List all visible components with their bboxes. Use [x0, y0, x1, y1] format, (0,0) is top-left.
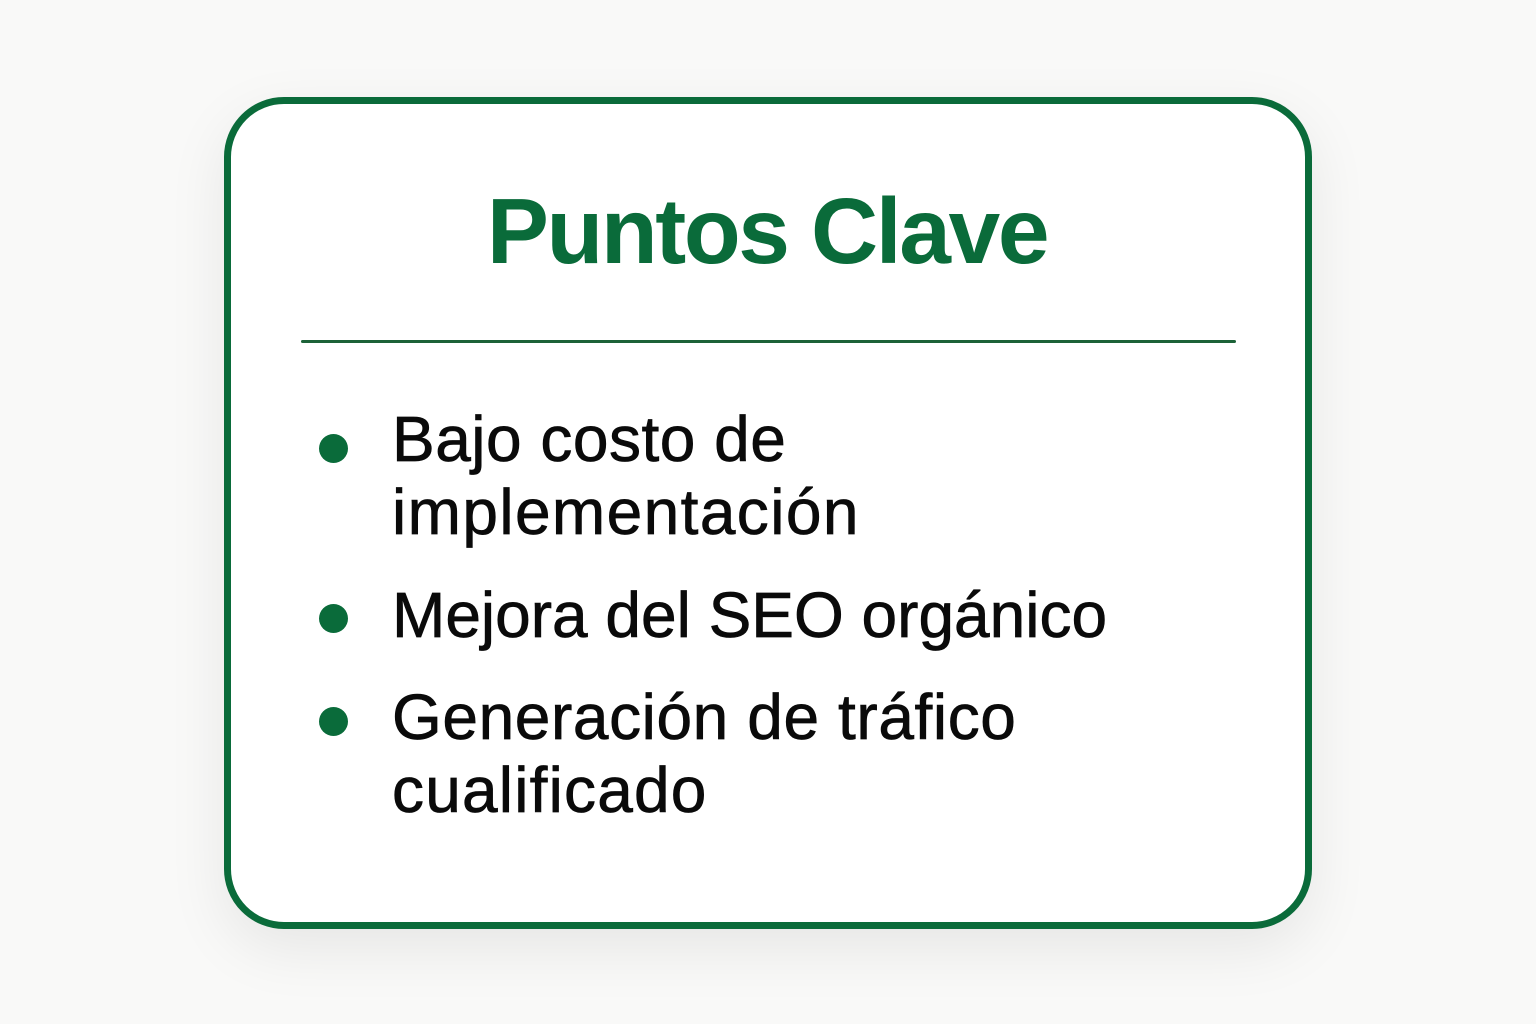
title: Puntos Clave — [487, 179, 1047, 283]
text: bullet 2: Mejora del SEO orgánico — [392, 579, 1107, 651]
panel: key points card — [224, 97, 1312, 929]
text: bullet 3 — [392, 681, 1017, 826]
text: bullet 1 — [392, 403, 860, 548]
icon: bullet 1 — [319, 434, 348, 463]
text: bullet 3: Generación de tráfico — [392, 681, 1017, 753]
icon: bullet 2 — [319, 604, 348, 633]
icon: bullet 3 — [319, 707, 348, 736]
text: bullet 3: cualificado — [392, 754, 708, 826]
text: bullet 1: Bajo costo de — [392, 403, 786, 475]
text: bullet 1: implementación — [392, 476, 860, 548]
